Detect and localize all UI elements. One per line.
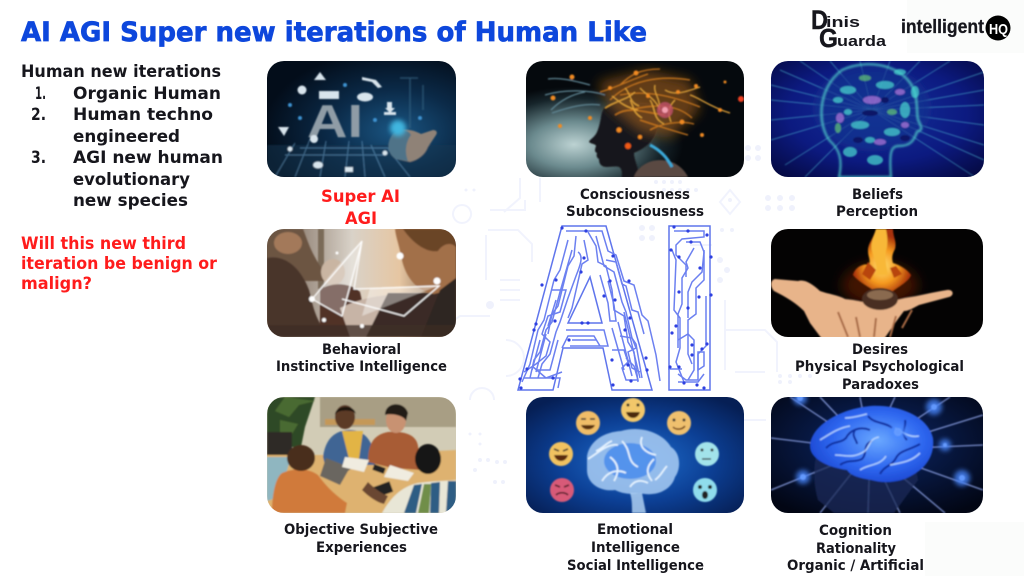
text block: human new iterations list: Human techno: [73, 105, 213, 125]
person in orange hoodie: [272, 445, 347, 513]
label: Behavioral Instinctive Intelligence: Behavioral: [322, 342, 401, 358]
label: Behavioral Instinctive Intelligence: Instinctive Intelligence: [276, 359, 447, 375]
callout: benign or malign question: iteration be benign or: [21, 254, 218, 274]
emoji faces: [549, 398, 719, 502]
logo: Dinis Guarda: inis: [826, 14, 860, 31]
label: Beliefs Perception: Beliefs: [852, 187, 903, 203]
label: Objective Subjective Experiences: Objective Subjective: [284, 522, 438, 538]
person in rust shirt: [368, 404, 422, 470]
panel: Emotional Intelligence image: [526, 397, 744, 513]
text block: human new iterations list: Organic Human: [73, 84, 221, 104]
laptop and papers: [320, 457, 414, 498]
logo: Dinis Guarda: uarda: [837, 33, 887, 50]
label: Desires Physical Psychological Paradoxes: Desires: [852, 342, 908, 358]
text block: human new iterations list: 1.: [35, 84, 46, 104]
label: Objective Subjective Experiences: [284, 522, 438, 556]
off-white bottom-right patch: [925, 522, 1024, 576]
callout: benign or malign question: Will this new third: [21, 234, 186, 254]
panel: Objective Subjective image: [267, 397, 456, 513]
label: Consciousness Subconsciousness: Subconsciousness: [566, 204, 704, 220]
label: Desires Physical Psychological Paradoxes: Physical Psychological: [795, 359, 964, 375]
label: Consciousness Subconsciousness: [566, 187, 704, 220]
text block: human new iterations list: AGI new human: [73, 148, 223, 168]
label: Super AI AGI: Super AI: [321, 187, 400, 207]
label: Desires Physical Psychological Paradoxes: Paradoxes: [842, 377, 919, 393]
label: Cognition Rationality Organic / Artificial: Rationality: [816, 541, 896, 557]
label: Consciousness Subconsciousness: Consciousness: [580, 187, 690, 203]
label: Desires Physical Psychological Paradoxes: [795, 342, 964, 393]
callout: benign or malign question: malign?: [21, 274, 92, 294]
letter A traces: [518, 226, 660, 390]
callout: benign or malign question: [21, 234, 218, 294]
label: Super AI AGI: [321, 187, 400, 229]
label: Behavioral Instinctive Intelligence: [276, 342, 447, 375]
logo: intelligent HQ: intelligent: [901, 17, 985, 38]
off-white logo patch: [907, 0, 1024, 53]
label: Objective Subjective Experiences: Experiences: [316, 540, 407, 556]
person in striped shirt: [362, 444, 456, 513]
label: Cognition Rationality Organic / Artificial: [787, 523, 924, 574]
logo: Dinis Guarda: [811, 5, 887, 53]
logo: intelligent HQ: [901, 16, 1010, 40]
letter I traces: [668, 226, 710, 390]
logo: Dinis Guarda: G: [819, 23, 838, 53]
text block: human new iterations list: new species: [73, 191, 188, 211]
label: Cognition Rationality Organic / Artificial: Cognition: [819, 523, 892, 539]
label: Emotional Intelligence Social Intelligence: Intelligence: [591, 540, 680, 556]
label: Emotional Intelligence Social Intelligence: Emotional: [597, 522, 673, 538]
person in blue jacket: [323, 405, 375, 465]
logo: Dinis Guarda: D: [811, 5, 828, 35]
brain: [587, 429, 679, 513]
central circuit-board letters AI: [518, 225, 713, 390]
label: Super AI AGI: AGI: [345, 209, 377, 229]
title: AI AGI Super new iterations of Human Like: [21, 17, 647, 48]
background: faint circuit pattern: [440, 145, 812, 484]
label: Beliefs Perception: Perception: [836, 204, 918, 220]
panel: Behavioral image: [267, 228, 456, 337]
label: Beliefs Perception: [836, 187, 918, 220]
text block: human new iterations list: evolutionary: [73, 170, 190, 190]
label: Cognition Rationality Organic / Artificial: Organic / Artificial: [787, 558, 924, 574]
text block: human new iterations list: 3.: [31, 148, 46, 168]
text block: human new iterations list: engineered: [73, 127, 180, 147]
panel: Beliefs image: [771, 61, 984, 177]
label: Emotional Intelligence Social Intelligence: Social Intelligence: [567, 558, 704, 574]
panel: Desires image: [771, 229, 983, 339]
panel: Cognition image: [771, 391, 983, 513]
panel: Super AI image: AI: [307, 95, 363, 147]
text block: human new iterations list: 2.: [31, 105, 46, 125]
text block: human new iterations list: Human new iterations: [21, 62, 221, 82]
text block: human new iterations list: [21, 62, 223, 211]
logo: intelligent HQ: HQ: [989, 21, 1008, 38]
circuit nodes: [518, 225, 713, 390]
panel: Consciousness image: [526, 61, 744, 189]
label: Emotional Intelligence Social Intelligence: [567, 522, 704, 574]
panel: Super AI image: [267, 61, 456, 177]
